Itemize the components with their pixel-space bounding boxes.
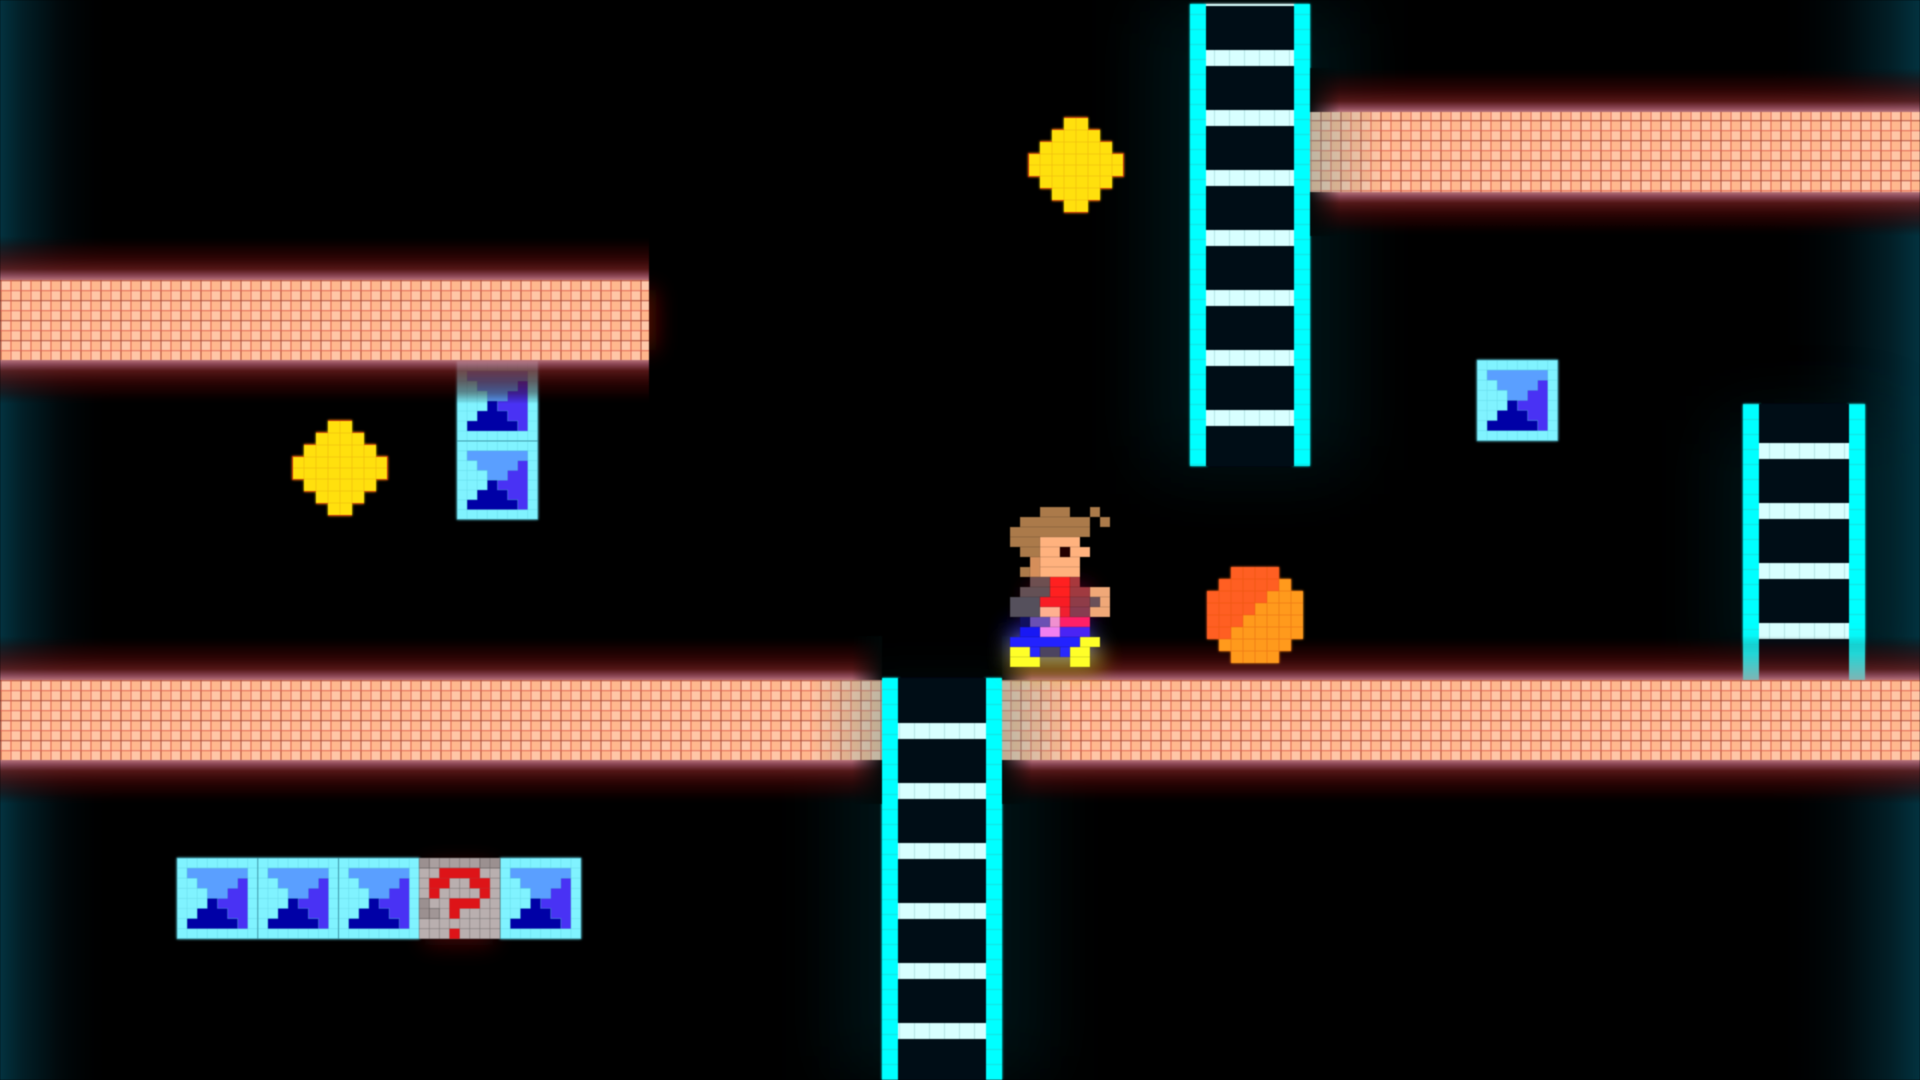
hand (1090, 587, 1110, 597)
platform: main floor left (0, 680, 882, 760)
block: single floating (1477, 360, 1558, 441)
platform glow overlays (0, 68, 1920, 804)
red glow behind question block (425, 865, 493, 945)
ladder: bottom centre (882, 678, 1002, 1080)
shirt (1050, 577, 1070, 587)
block row with question block (177, 858, 581, 945)
block stack under upper-left platform (457, 361, 538, 519)
ball: orange rolling enemy (1207, 567, 1303, 663)
coin: lower (292, 420, 388, 516)
ladder: top (1190, 4, 1310, 466)
platform: upper right (1310, 112, 1920, 192)
character: pixel boy running (1010, 507, 1110, 669)
character glow: legs and feet (1010, 587, 1100, 669)
question block (419, 858, 500, 939)
ladder: right (1743, 404, 1865, 680)
hair (1010, 507, 1110, 577)
coin: upper (1028, 117, 1124, 213)
character sprite (1010, 507, 1110, 667)
shoes (1010, 637, 1100, 667)
soft red bloom right of upper-left platform (630, 290, 656, 350)
platform: upper left (0, 280, 649, 360)
shirt shadow (1030, 577, 1050, 587)
ladder foot fade: right ladder rails into floor glow (1743, 620, 1865, 680)
platform: main floor right (1002, 680, 1920, 760)
shorts (1020, 617, 1030, 627)
face (1040, 537, 1090, 577)
